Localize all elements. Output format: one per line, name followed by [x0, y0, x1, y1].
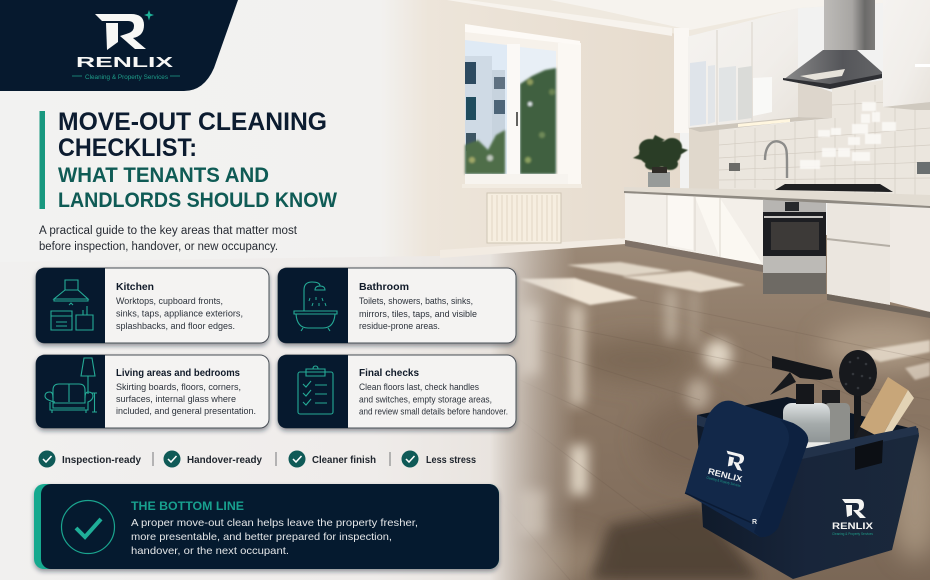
bottom line text: handover, or the next occupant. — [131, 545, 289, 557]
bucket logo: RENLIX — [832, 521, 873, 531]
towel: Cleaning & Property Services — [706, 476, 741, 488]
bucket logo — [832, 499, 873, 536]
panel: kitchen — [36, 268, 269, 343]
kitchen text: Worktops, cupboard fronts, — [116, 296, 223, 306]
upper kitchen cabinets — [688, 0, 930, 132]
final checks text: Final checks — [359, 367, 419, 379]
benefit badges — [38, 450, 476, 468]
kitchen text: splashbacks, and floor edges. — [116, 321, 235, 331]
radiator — [487, 193, 561, 243]
towel — [685, 401, 808, 537]
panel: living areas and bedrooms — [36, 355, 269, 428]
living areas text — [116, 367, 256, 416]
bathroom text — [359, 281, 477, 331]
skirting — [440, 238, 625, 258]
badge: handover-ready: Handover-ready — [187, 455, 262, 466]
cleaning caddy — [590, 350, 919, 580]
brush — [839, 350, 877, 450]
final checks text: and switches, empty storage areas, — [359, 394, 492, 404]
backsplash — [719, 80, 930, 202]
bucket body — [697, 425, 919, 579]
floor — [0, 235, 930, 580]
kitchen text: Kitchen — [116, 281, 154, 293]
badge: less stress: Less stress — [426, 455, 476, 466]
icon: teal sparkle — [144, 10, 154, 20]
towel: R — [752, 519, 757, 526]
back wall — [0, 0, 680, 262]
plant — [633, 135, 688, 187]
title block: LANDLORDS SHOULD KNOW — [58, 189, 337, 212]
bathroom text: mirrors, tiles, taps, and visible — [359, 309, 477, 319]
bathroom text: Bathroom — [359, 281, 409, 293]
kitchen text — [116, 281, 243, 331]
spray bottle — [770, 356, 833, 455]
ceiling — [460, 0, 930, 36]
final checks text: Clean floors last, check handles — [359, 382, 479, 392]
bucket logo: Cleaning & Property Services — [832, 532, 873, 536]
badge: inspection-ready — [38, 450, 141, 468]
oven — [763, 200, 826, 294]
tagline: Cleaning & Property Services — [85, 74, 169, 81]
icon: check circle — [62, 500, 114, 554]
badge: cleaner finish — [288, 450, 376, 468]
panel: the bottom line — [34, 484, 499, 569]
tap — [765, 141, 787, 178]
small bottle — [822, 390, 850, 449]
subheading: WHAT TENANTS AND — [58, 164, 269, 187]
accent bar — [40, 111, 45, 209]
badge: cleaner finish: Cleaner finish — [312, 455, 376, 466]
icon: clipboard — [298, 366, 333, 414]
intro text: before inspection, handover, or new occupancy. — [39, 241, 278, 253]
wooden brush — [855, 377, 914, 448]
intro text: A practical guide to the key areas that matter most — [39, 225, 298, 237]
bottom line heading: THE BOTTOM LINE — [131, 501, 244, 513]
icon: sofa and lamp — [45, 358, 97, 413]
badge: handover-ready — [164, 450, 262, 468]
panel: bathroom — [278, 268, 516, 343]
final checks text: and review small details before handover. — [359, 406, 508, 416]
badge: less stress — [402, 450, 476, 468]
kitchen text: sinks, taps, appliance exteriors, — [116, 308, 243, 318]
living areas text: surfaces, internal glass where — [116, 394, 236, 404]
header logo tab — [0, 0, 238, 91]
window — [462, 24, 582, 188]
lower cabinets — [625, 192, 930, 318]
bathroom text: residue-prone areas. — [359, 321, 440, 331]
intro text — [39, 225, 298, 253]
caddy shadow — [590, 505, 760, 580]
column — [674, 28, 689, 133]
bathroom text: Toilets, showers, baths, sinks, — [359, 296, 473, 306]
icon: hood and stove — [51, 280, 93, 330]
living areas text: included, and general presentation. — [116, 406, 256, 416]
worktop and hob — [624, 184, 930, 208]
towel: RENLIX — [707, 466, 744, 484]
extractor hood — [783, 0, 882, 89]
bucket rear — [697, 397, 918, 453]
title block — [40, 108, 337, 212]
icon: shower and bath — [294, 282, 337, 331]
panel: final checks — [278, 355, 516, 428]
heading: MOVE-OUT CLEANING — [58, 108, 327, 136]
brand name: RENLIX — [76, 55, 174, 71]
ceiling ledge — [447, 0, 672, 36]
bottom line text — [131, 517, 418, 557]
living areas text: Living areas and bedrooms — [116, 367, 240, 379]
living areas text: Skirting boards, floors, corners, — [116, 382, 241, 392]
bottom line text: more presentable, and better prepared for inspection, — [131, 531, 392, 543]
title block: CHECKLIST: — [58, 134, 197, 162]
icon: R logo — [95, 14, 146, 50]
floor fade to white — [0, 240, 620, 580]
badge: inspection-ready: Inspection-ready — [62, 455, 141, 466]
final checks text — [359, 367, 508, 416]
bottom line text: A proper move-out clean helps leave the property fresher, — [131, 517, 418, 529]
